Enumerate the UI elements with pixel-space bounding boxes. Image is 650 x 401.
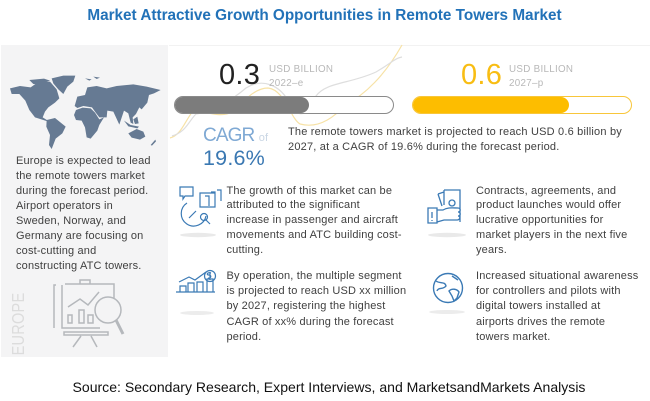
value: 0.6: 0.6: [461, 59, 502, 91]
text: situational awareness: digital towers installed at: [476, 300, 600, 312]
text: growth drivers: [226, 185, 402, 256]
label: EUROPE: EUROPE: [8, 293, 28, 355]
text: Europe summary: Germany are focusing on: [16, 230, 143, 242]
text: Europe summary: constructing ATC towers.: [16, 260, 142, 272]
text: by operation: [226, 270, 406, 343]
unit: USD billion 2022: USD BILLION: [269, 64, 333, 75]
CAGR callout: 19.6%: [203, 146, 265, 170]
text: Europe summary: [16, 154, 151, 272]
text: market projection: [288, 126, 622, 152]
text: by operation: by 2027, registering the highest: [226, 300, 385, 312]
text: Europe summary: during the forecast period.: [16, 184, 148, 196]
text: opportunities: [476, 185, 627, 256]
unit: USD billion 2027: 2027–p: [509, 78, 544, 88]
source line: Source: Secondary Research, Expert Interviews, and MarketsandMarkets Analysis: [73, 379, 585, 395]
text: opportunities: market players in the next five: [476, 229, 627, 241]
text: by operation: period.: [226, 331, 261, 343]
text: situational awareness: for controllers and pilots with: [476, 285, 621, 297]
panel: Europe: [1, 45, 168, 357]
text: by operation: CAGR of xx% during the forecast: [226, 316, 394, 328]
panel: market size: [169, 45, 650, 358]
text: Europe summary: Airport operators in: [16, 200, 113, 212]
text: by operation: is projected to reach USD xx million: [226, 285, 406, 297]
text: growth drivers: movements and ATC building cost-: [226, 229, 402, 241]
CAGR callout: CAGR of: [203, 125, 268, 146]
text: market projection: The remote towers market is projected to reach USD 0.6 billion by: [288, 126, 622, 138]
unit: USD billion 2027: [509, 64, 573, 88]
text: market projection: 2027, at a CAGR of 19.6% during the forecast period.: [288, 140, 560, 152]
bar: 2022: [174, 96, 394, 114]
text: opportunities: lucrative opportunities for: [476, 214, 604, 226]
bar: 2027: [412, 96, 632, 114]
text: situational awareness: towers market.: [476, 331, 551, 343]
title: Market Attractive Growth Opportunities in Remote Towers Market: [87, 7, 562, 24]
unit: USD billion 2022: 2022–e: [269, 78, 304, 88]
text: growth drivers: The growth of this market can be: [226, 185, 392, 197]
text: Europe summary: the remote towers market: [16, 170, 145, 182]
text: growth drivers: increase in passenger and aircraft: [226, 214, 398, 226]
unit: USD billion 2022: [269, 64, 333, 88]
text: Europe summary: Europe is expected to lead: [16, 154, 151, 166]
text: opportunities: product launches would offer: [476, 199, 621, 211]
text: by operation: By operation, the multiple segment: [226, 270, 402, 282]
text: situational awareness: [476, 270, 638, 343]
unit: USD billion 2027: USD BILLION: [509, 64, 573, 75]
text: situational awareness: airports drives the remote: [476, 316, 605, 328]
text: growth drivers: attributed to the significant: [226, 199, 360, 211]
CAGR callout: [203, 125, 268, 170]
text: Europe summary: cost-cutting and: [16, 244, 96, 256]
text: opportunities: Contracts, agreements, and: [476, 185, 616, 197]
value: 0.3: 0.3: [219, 59, 260, 91]
text: growth drivers: cutting.: [226, 244, 263, 256]
text: situational awareness: Increased situational awareness: [476, 270, 638, 282]
text: opportunities: years.: [476, 244, 507, 256]
text: Europe summary: Sweden, Norway, and: [16, 214, 126, 226]
